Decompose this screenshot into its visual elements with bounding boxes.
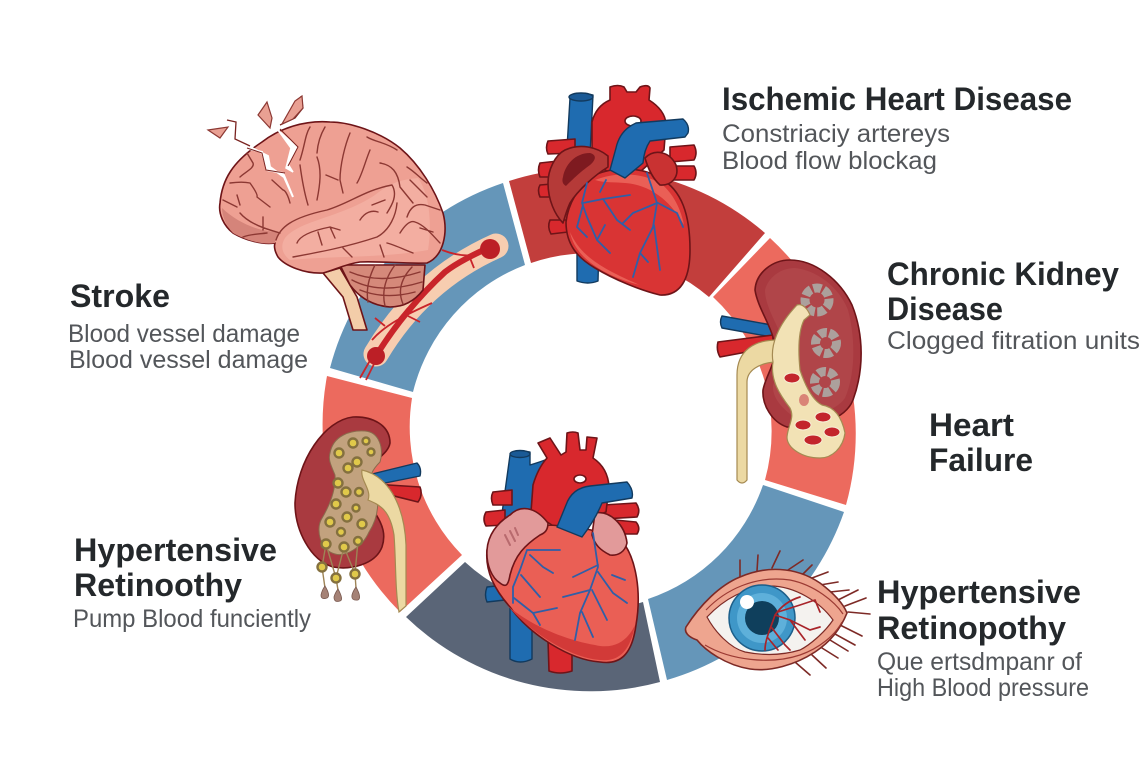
right kidney pelvis bbox=[772, 305, 845, 458]
label: Stroke: Stroke bbox=[70, 278, 170, 314]
label: Stroke: Blood vessel damage bbox=[69, 346, 308, 374]
label: Hypertensive Retinoothy left: Pump Blood funciently bbox=[73, 605, 311, 633]
label: Hypertensive Retinopothy right bbox=[877, 574, 1089, 702]
label: Hypertensive Retinopothy right: Que ertsdmpanr of bbox=[877, 648, 1082, 676]
label: Hypertensive Retinoothy left: Hypertensive bbox=[74, 532, 277, 568]
top heart left atrium bbox=[548, 146, 608, 223]
label: Ischemic Heart Disease: Blood flow blockag bbox=[722, 147, 937, 175]
bottom heart arch hole bbox=[574, 475, 586, 483]
label: Chronic Kidney Disease: Disease bbox=[887, 291, 1003, 327]
pupil bbox=[745, 601, 779, 635]
right kidney body bbox=[755, 260, 861, 427]
top heart atrium cavity bbox=[562, 153, 595, 186]
top heart sheen bbox=[570, 174, 684, 285]
ring segment: heart failure bbox=[648, 485, 844, 680]
highlight bbox=[740, 595, 754, 609]
label: Heart Failure: Heart bbox=[929, 407, 1014, 443]
lightning crack bbox=[227, 96, 303, 197]
label: Chronic Kidney Disease bbox=[887, 256, 1140, 355]
cerebellum bbox=[340, 265, 425, 307]
label: Hypertensive Retinopothy right: Retinopothy bbox=[877, 610, 1066, 646]
right kidney inner bbox=[765, 268, 853, 418]
ring segment: left kidney bbox=[323, 376, 462, 612]
label: Hypertensive Retinopothy right: High Blood pressure bbox=[877, 674, 1089, 702]
right kidney ureter bbox=[737, 340, 777, 483]
bottom heart right atrium bbox=[592, 513, 627, 555]
left kidney deposits bbox=[318, 438, 374, 582]
top heart vessels bbox=[538, 93, 696, 283]
retinal vessels bbox=[765, 597, 820, 650]
cerebrum bbox=[220, 122, 445, 273]
label: Stroke bbox=[68, 278, 308, 374]
label: Hypertensive Retinoothy left bbox=[73, 532, 311, 633]
ring segment: coronary bbox=[406, 562, 660, 691]
top heart aorta bbox=[592, 86, 666, 172]
lid fold bbox=[705, 579, 843, 660]
left kidney body bbox=[295, 417, 390, 568]
top heart arch hole bbox=[625, 116, 641, 126]
outer eyelid bbox=[685, 569, 847, 670]
ring segment: ischemic heart disease bbox=[509, 168, 765, 297]
clogged filtration units bbox=[805, 288, 836, 392]
label: Chronic Kidney Disease: Chronic Kidney bbox=[887, 256, 1119, 292]
left kidney ureter bbox=[362, 470, 406, 612]
iris inner bbox=[737, 593, 787, 643]
brainstem bbox=[323, 268, 367, 330]
illustration: brain with stroke bbox=[208, 96, 500, 380]
label: Chronic Kidney Disease: Clogged fitration units bbox=[887, 327, 1140, 355]
label: Ischemic Heart Disease bbox=[722, 81, 1072, 175]
frontal lobe shade bbox=[222, 208, 280, 243]
label: Heart Failure bbox=[929, 407, 1033, 478]
label: Hypertensive Retinopothy right: Hypertensive bbox=[877, 574, 1081, 610]
illustration: right kidney bbox=[717, 260, 861, 483]
top heart right atrium bbox=[645, 152, 677, 185]
label: Ischemic Heart Disease: Ischemic Heart Disease bbox=[722, 81, 1072, 117]
bottom heart lower shade bbox=[508, 606, 635, 660]
sclera bbox=[707, 586, 833, 654]
top heart coronary veins bbox=[577, 173, 683, 277]
label: Heart Failure: Failure bbox=[929, 442, 1033, 478]
artery inside ring bbox=[360, 239, 500, 380]
top heart ventricles bbox=[566, 169, 690, 295]
illustration: eye bbox=[685, 551, 870, 675]
brain folds bbox=[223, 127, 440, 257]
ring diagram bbox=[323, 168, 856, 691]
illustration: left kidney bbox=[295, 417, 421, 612]
bottom heart pulmonary artery bbox=[557, 482, 632, 537]
bottom heart ventricles bbox=[487, 525, 638, 663]
temporal lobe highlight bbox=[282, 178, 430, 260]
bottom heart coronary veins bbox=[513, 533, 627, 640]
left kidney strands and drops bbox=[321, 541, 360, 602]
label: Ischemic Heart Disease: Constriaciy artereys bbox=[722, 120, 950, 148]
ring segment: stroke bbox=[330, 183, 525, 392]
bottom heart aorta bbox=[531, 432, 609, 530]
right kidney blood cells bbox=[784, 373, 840, 445]
bottom heart atrium marks bbox=[505, 528, 518, 545]
illustration: top heart bbox=[538, 86, 696, 295]
eyelashes bbox=[740, 551, 870, 675]
left kidney vessels bbox=[368, 463, 421, 485]
iris bbox=[729, 585, 795, 651]
lightning shards bbox=[208, 96, 303, 138]
ring segment: chronic kidney disease bbox=[713, 238, 856, 505]
illustration: bottom heart bbox=[484, 432, 639, 673]
top heart pulmonary artery bbox=[610, 119, 688, 178]
label: Stroke: Blood vessel damage bbox=[68, 320, 300, 348]
bottom heart left atrium bbox=[487, 509, 548, 585]
label: Hypertensive Retinoothy left: Retinoothy bbox=[74, 567, 242, 603]
right kidney vessels bbox=[720, 316, 777, 338]
bottom heart vessels bbox=[484, 450, 639, 673]
left kidney tan sinus bbox=[319, 431, 381, 555]
